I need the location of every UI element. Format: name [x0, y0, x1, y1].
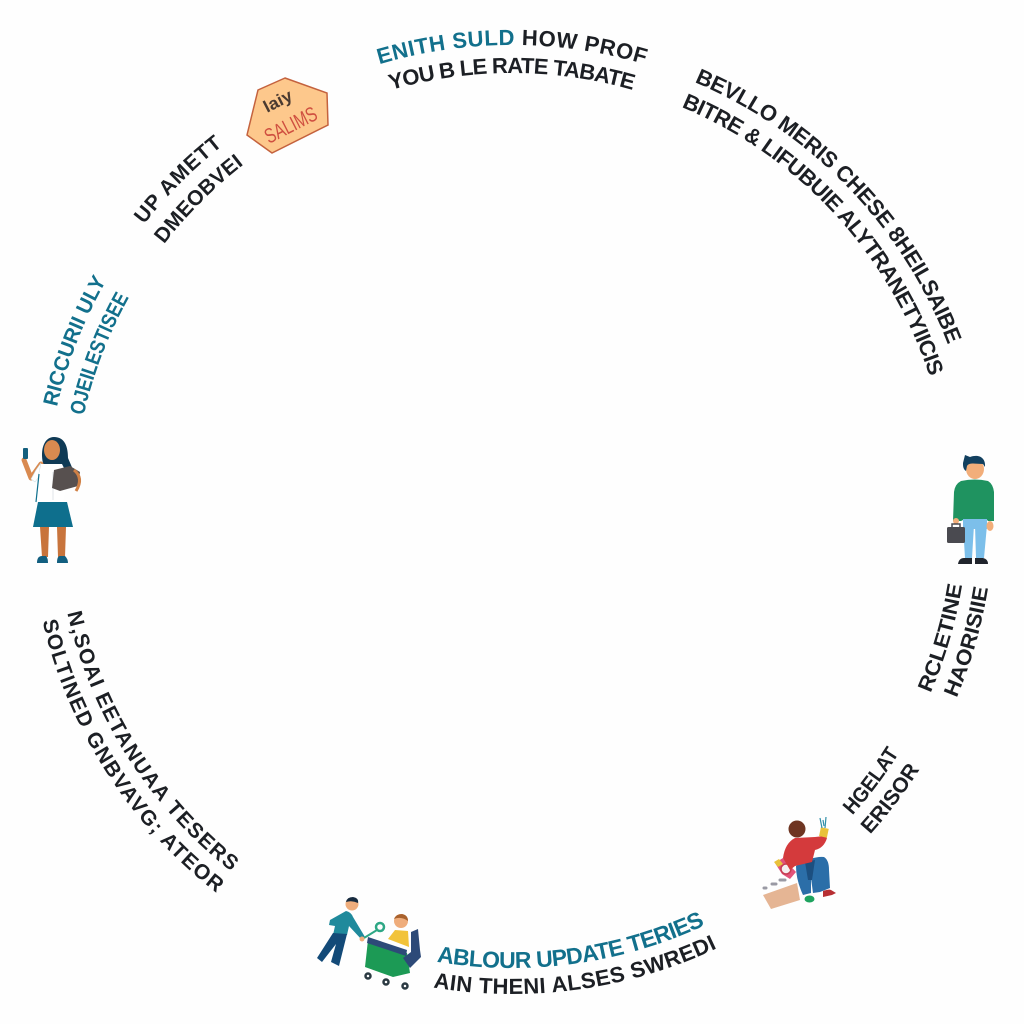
text block: bottom heading: AIN THENI ALSES SWREDI	[434, 935, 716, 994]
text block: lower right	[918, 584, 988, 697]
text block: lower left: N,SOAI EETANUAA TESERS	[68, 610, 238, 870]
icon: sales tag hexagon: SALIMS	[261, 103, 321, 148]
text block: left teal label: RICCURII ULY	[43, 274, 104, 406]
text block: lower left: SOLTINED GNBVAVG; ATEOR	[44, 620, 223, 893]
text block: top heading: ENITH SULD HOW PROF	[376, 30, 648, 64]
text block: bottom right short label	[842, 746, 920, 834]
text block: upper left: DMEOBVEI	[154, 154, 243, 244]
icon: sales tag hexagon	[247, 78, 328, 153]
text block: upper left: UP AMETT	[134, 134, 219, 222]
text block: upper right: BEVLLO MERIS CHESE 8HEILSAIBE	[696, 68, 962, 344]
text block: upper left	[134, 134, 243, 244]
text block: upper right: BITRE & LIFUBUIE ALYTRANETYIICIS	[682, 94, 942, 375]
icon: seated person with box	[763, 817, 836, 909]
text block: bottom right short label: HGELAT	[842, 746, 897, 814]
icon: person pushing shopping cart with child	[317, 897, 421, 988]
text block: lower right: HAORISIIE	[944, 586, 988, 697]
text block: top heading: YOU B LE RATE TABATE	[387, 58, 636, 90]
text block: lower right: RCLETINE	[918, 584, 962, 692]
text block: bottom heading: ABLOUR UPDATE TERIES	[437, 912, 703, 968]
icon: woman with phone and bag	[23, 437, 80, 563]
text block: left teal label: OJEILESTISEE	[70, 291, 129, 414]
text block: bottom right short label: ERISOR	[860, 764, 920, 834]
text block: top heading	[376, 30, 648, 90]
icon: sales tag hexagon: laiy	[260, 86, 296, 117]
icon: man with briefcase	[947, 455, 994, 564]
